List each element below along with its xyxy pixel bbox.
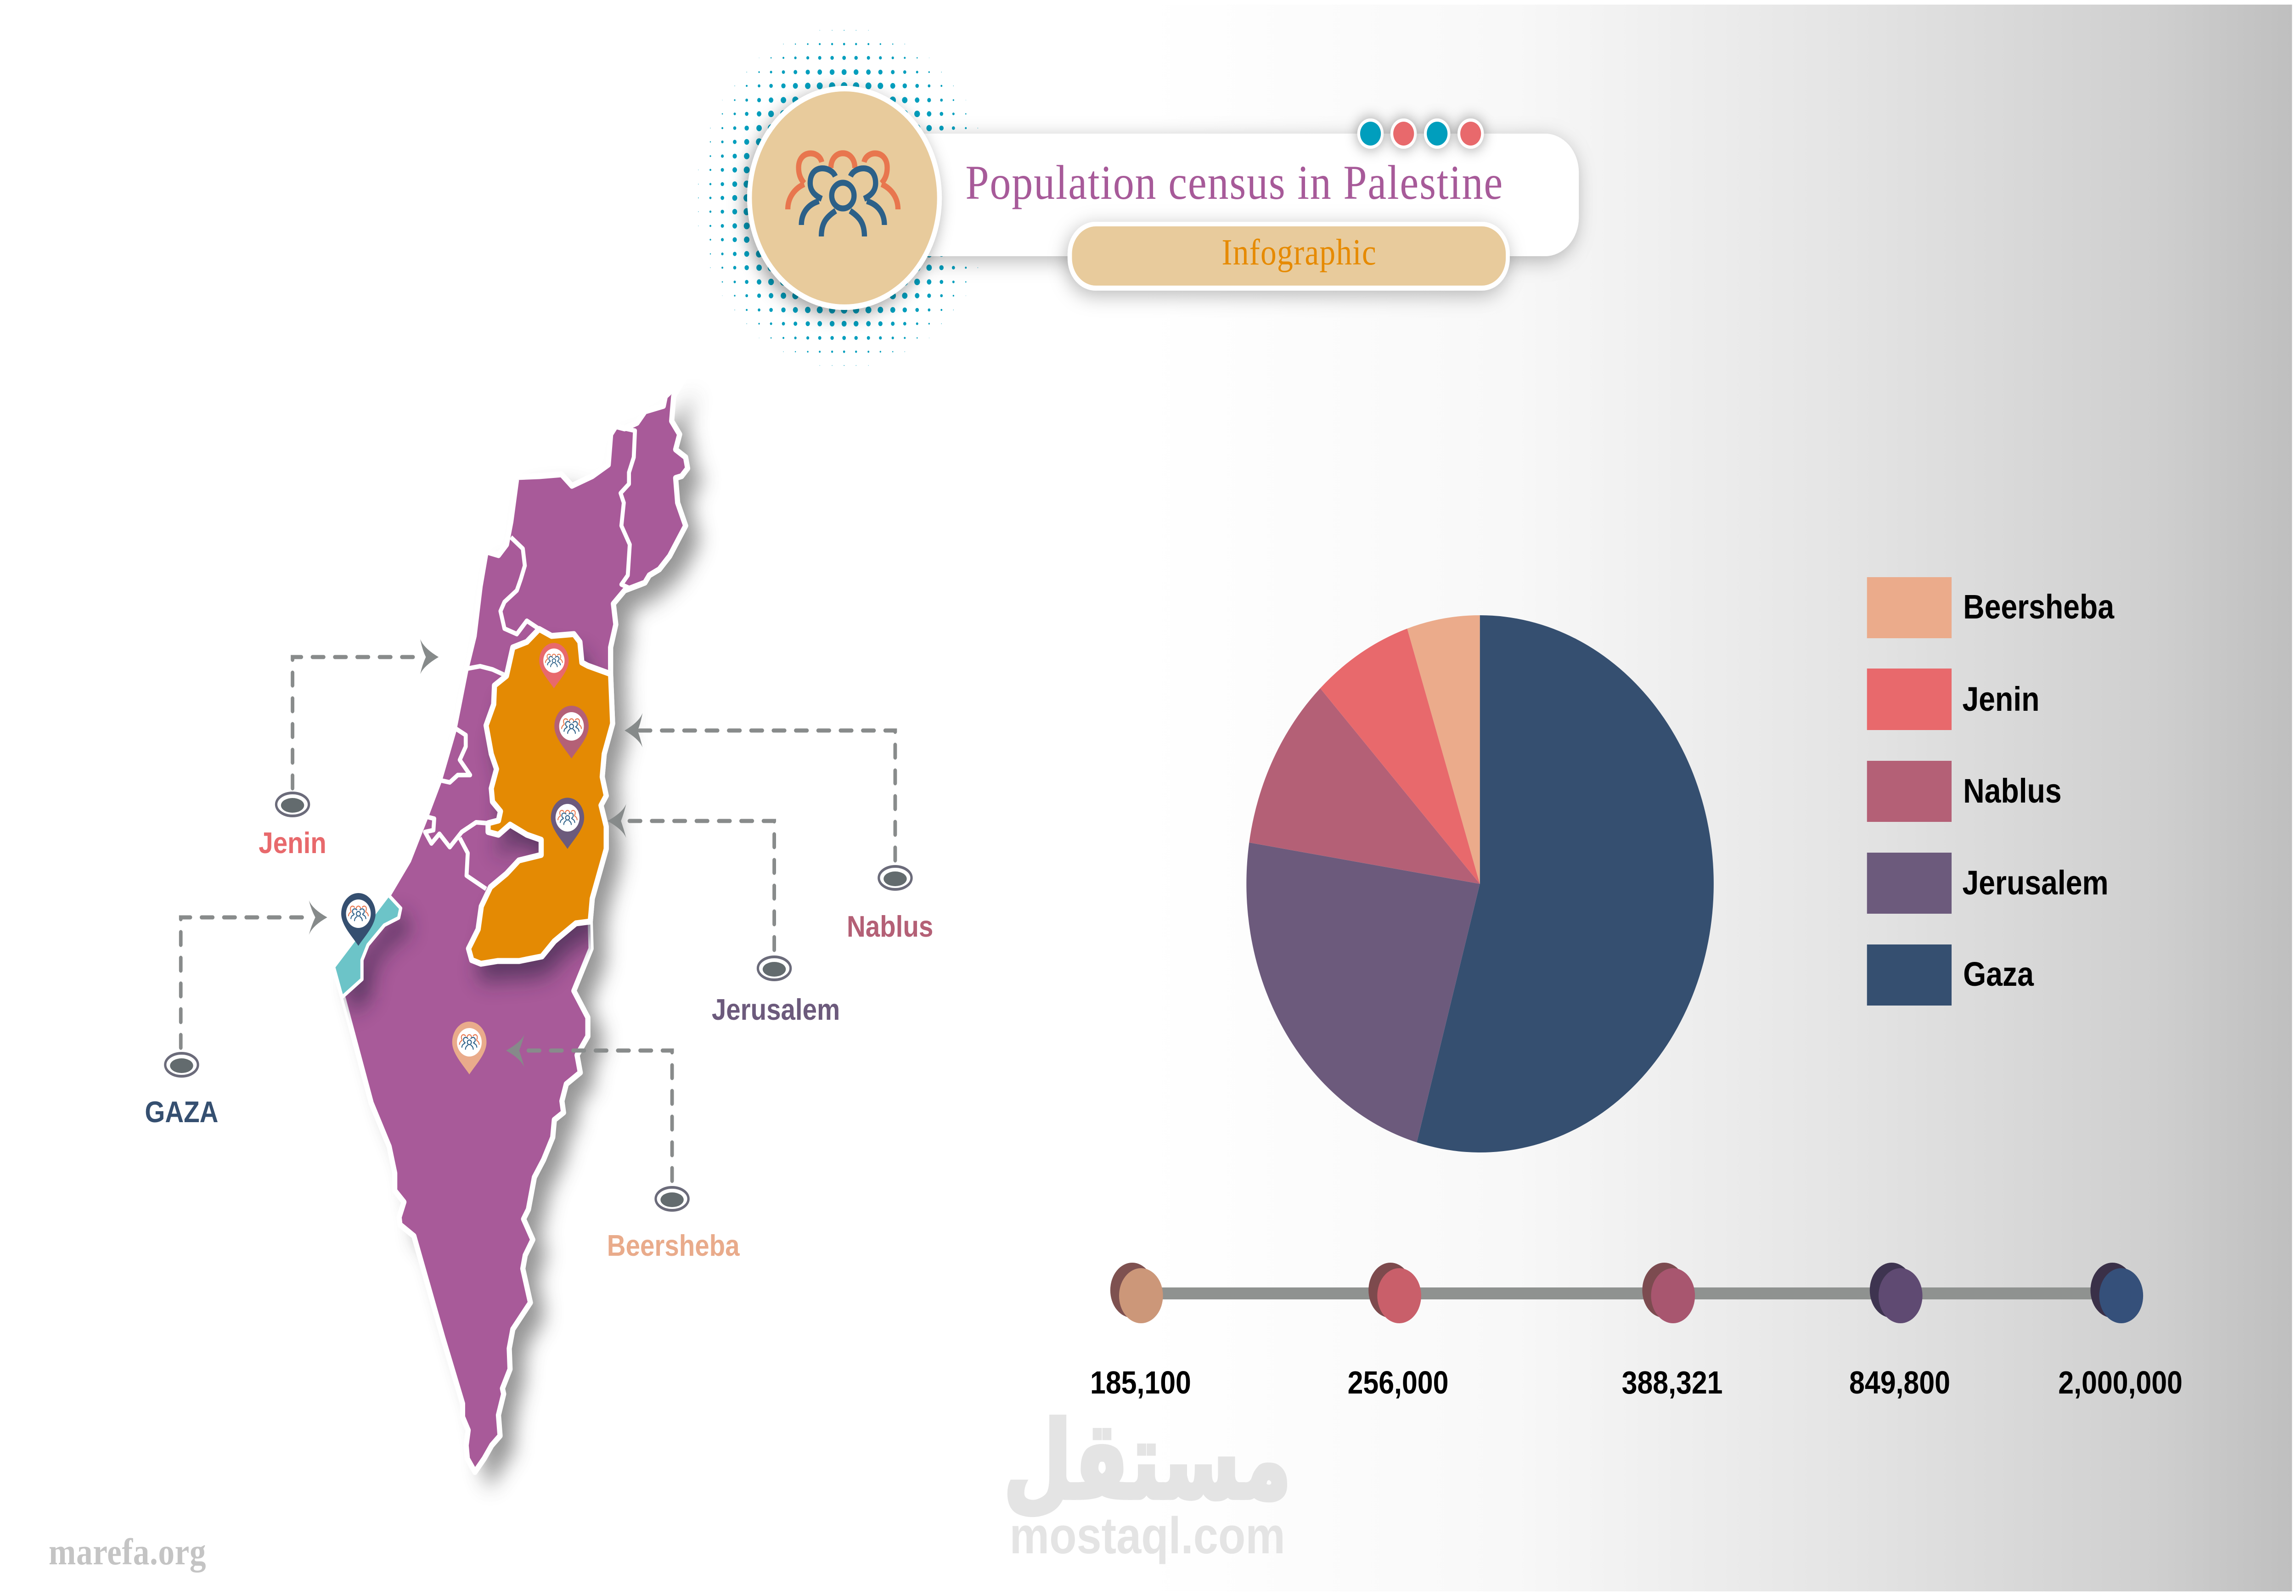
subtitle pill: Infographic bbox=[1221, 232, 1376, 273]
node: 388,321: 388,321 bbox=[1622, 1365, 1723, 1400]
callout: Jenin: Jenin bbox=[259, 826, 326, 860]
callout: Jerusalem bbox=[608, 804, 840, 1026]
halftone dots around the emblem bbox=[698, 30, 990, 366]
district borders bbox=[425, 428, 635, 889]
pin: Gaza bbox=[341, 893, 376, 946]
node: 2,000,000 bbox=[2058, 1263, 2183, 1400]
pin: Jenin bbox=[539, 643, 568, 688]
pin: Jerusalem bbox=[551, 798, 584, 849]
callout: Jenin bbox=[259, 639, 439, 860]
subtitle pill bbox=[1068, 222, 1510, 291]
node: 849,800: 849,800 bbox=[1849, 1365, 1950, 1400]
source credit: marefa.org: marefa.org bbox=[49, 1531, 206, 1573]
node: 849,800 bbox=[1849, 1263, 1950, 1400]
node: 256,000: 256,000 bbox=[1348, 1365, 1448, 1400]
shadow cast by West Bank and Gaza onto the map bbox=[343, 647, 620, 1013]
legend: Nablus bbox=[1963, 772, 2062, 810]
legend: Gaza bbox=[1963, 955, 2034, 993]
timeline of population figures bbox=[1090, 1263, 2183, 1400]
West Bank region bbox=[468, 629, 613, 964]
node: 256,000 bbox=[1348, 1263, 1448, 1400]
Gaza Strip region bbox=[334, 895, 401, 997]
callout: Beersheba: Beersheba bbox=[607, 1229, 740, 1262]
node: 185,100 bbox=[1090, 1263, 1191, 1400]
pin: Beersheba bbox=[452, 1022, 486, 1074]
purple territory bbox=[334, 379, 687, 1472]
four decorative dots bbox=[1357, 118, 1484, 149]
pie chart bbox=[1246, 615, 1714, 1152]
title bar bbox=[878, 134, 1579, 256]
node: 388,321 bbox=[1622, 1263, 1723, 1400]
map drop shadow bbox=[349, 394, 703, 1487]
callout: Gaza: GAZA bbox=[145, 1095, 218, 1129]
legend bbox=[1867, 577, 2114, 1006]
watermark: mostaql logo: mostaql.com bbox=[1010, 1507, 1285, 1565]
watermark: mostaql logo: مستقل bbox=[1003, 1399, 1291, 1523]
icon: people emblem bbox=[747, 86, 942, 310]
header: title banner bbox=[698, 30, 1579, 366]
pin: Nablus bbox=[554, 706, 589, 759]
node: 2,000,000: 2,000,000 bbox=[2058, 1365, 2183, 1400]
title text: Population census in Palestine bbox=[965, 156, 1503, 209]
callout: Beersheba bbox=[506, 1034, 740, 1262]
map of Palestine bbox=[334, 379, 703, 1487]
legend: Beersheba bbox=[1963, 588, 2114, 626]
callout: Jerusalem: Jerusalem bbox=[712, 993, 840, 1026]
callout: Nablus: Nablus bbox=[847, 910, 933, 943]
legend: Jerusalem bbox=[1962, 864, 2109, 902]
timeline bar bbox=[1149, 1287, 2107, 1299]
legend: Jenin bbox=[1962, 680, 2039, 718]
callout: Nablus bbox=[625, 713, 933, 943]
node: 185,100: 185,100 bbox=[1090, 1365, 1191, 1400]
callout: Gaza bbox=[145, 900, 327, 1129]
